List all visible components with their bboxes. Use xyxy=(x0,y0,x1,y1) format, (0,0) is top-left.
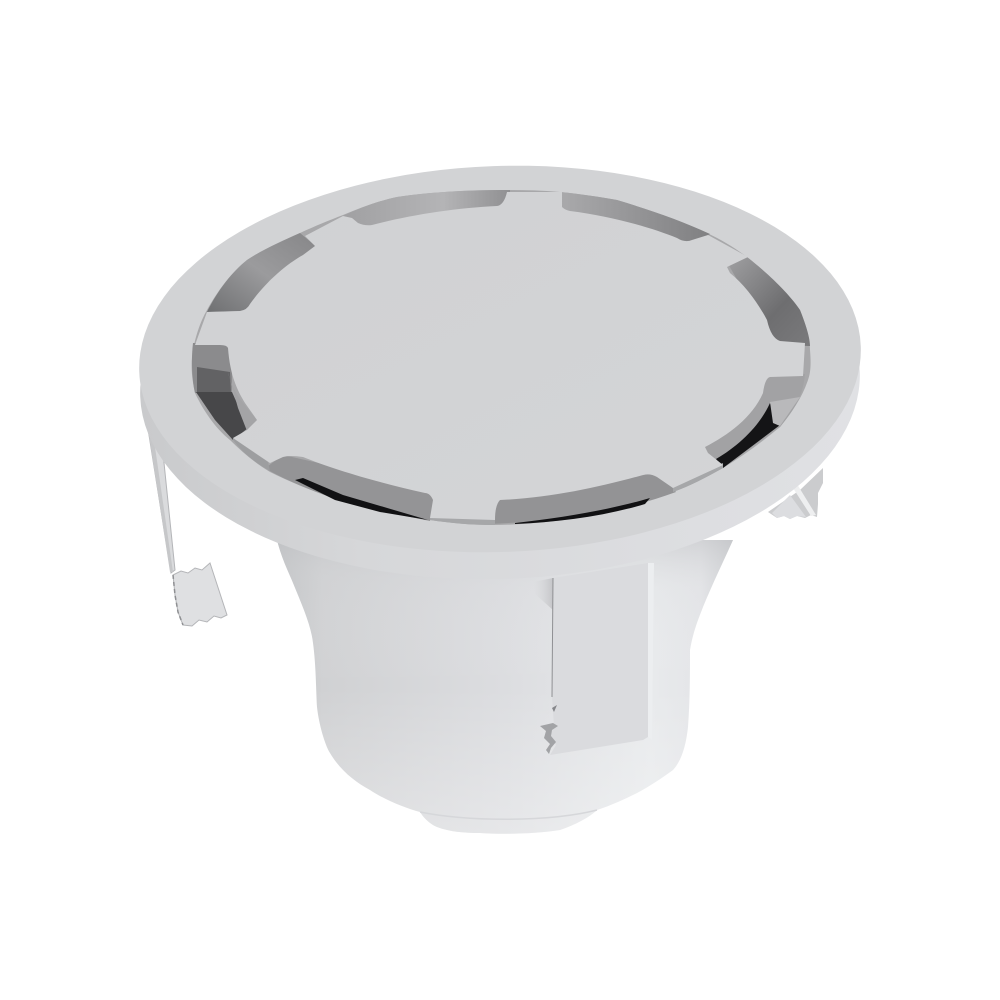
left spring clip xyxy=(145,410,227,626)
right spring clip xyxy=(768,468,823,519)
flange top face xyxy=(132,154,868,564)
slot: bottom right xyxy=(490,472,676,524)
slot: upper left xyxy=(207,233,318,312)
slot: right upper xyxy=(727,257,810,346)
flange outer edge xyxy=(133,177,867,591)
lower right rim strip xyxy=(673,463,723,492)
slot: top right xyxy=(558,192,710,245)
recessed well xyxy=(192,190,811,525)
lower left rim strip xyxy=(233,438,270,471)
slot: bottom left xyxy=(268,455,435,521)
slot: right lower xyxy=(700,374,805,468)
bottom rim strip xyxy=(430,518,495,525)
conical body with bottom nozzle xyxy=(277,540,733,834)
foil tape label xyxy=(533,563,654,755)
slotted lid with tabs xyxy=(195,192,805,520)
slot: top xyxy=(343,190,510,230)
slot: left lower xyxy=(192,343,258,440)
